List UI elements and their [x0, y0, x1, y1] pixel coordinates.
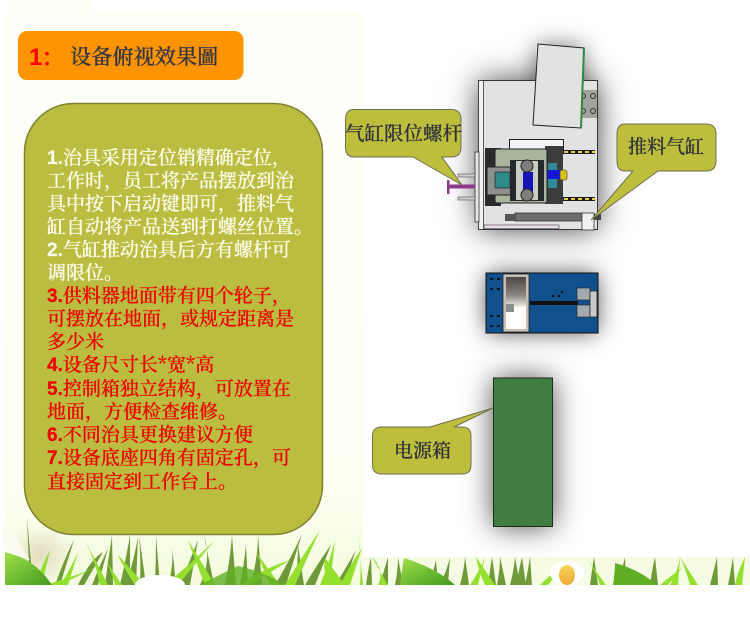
callout: push cylinder — [591, 124, 716, 220]
red description text: 直接固定到工作台上。 — [47, 467, 237, 494]
callout: cylinder limit screw — [345, 110, 462, 185]
rails — [563, 150, 595, 201]
shadow: tilted feeder card — [536, 46, 582, 126]
shadow: machine base — [479, 81, 597, 229]
white description text: 1.治具采用定位销精确定位， — [47, 143, 291, 170]
callout: power box — [372, 408, 493, 474]
bolt plate — [580, 90, 597, 118]
base plate — [478, 80, 598, 230]
callout: cylinder limit screw: 气缸限位螺杆 — [345, 123, 462, 145]
white description text — [47, 143, 313, 285]
grass: left meadow — [2, 518, 363, 597]
left bracket — [475, 152, 479, 222]
title bar — [18, 31, 244, 80]
white description text: 调限位。 — [47, 258, 123, 285]
red description text: 6.不同治具更换建议方便 — [47, 420, 253, 447]
slide block — [510, 140, 567, 204]
red description text: 7.设备底座四角有固定孔，可 — [47, 443, 291, 470]
white daisy — [135, 575, 185, 595]
pusher head — [577, 288, 597, 317]
panel: description — [24, 104, 322, 534]
callout: power box: 电源箱 — [394, 440, 451, 462]
red description text: 4.设备尺寸长*宽*高 — [47, 350, 214, 377]
grass: lower strip — [366, 557, 745, 585]
red description text: 多少米 — [47, 327, 104, 354]
callout: push cylinder: 推料气缸 — [628, 136, 704, 158]
diagram: green power box — [494, 378, 552, 526]
pusher rod — [530, 301, 578, 305]
diagram: top view of machine — [447, 44, 601, 230]
white description text: 2.气缸推动治具后方有螺杆可 — [47, 235, 291, 262]
limit screw — [447, 174, 475, 200]
mounting holes — [490, 278, 563, 327]
shadow: power box — [494, 379, 552, 526]
shadow: blue feeder — [487, 274, 597, 332]
white description text: 缸自动将产品送到打螺丝位置。 — [47, 212, 313, 239]
daisy — [550, 561, 584, 585]
red description text: 5.控制箱独立结构，可放置在 — [47, 374, 291, 401]
red description text: 可摆放在地面，或规定距离是 — [47, 304, 294, 331]
tilted feeder card — [533, 44, 585, 128]
bottom strip — [484, 225, 559, 228]
red description text — [47, 281, 294, 494]
white description text: 具中按下启动键即可，推料气 — [47, 189, 294, 216]
white description text: 工作时，员工将产品摆放到治 — [47, 166, 295, 193]
hopper — [503, 274, 529, 332]
push cylinder — [505, 213, 601, 230]
red description text: 地面，方便检查维修。 — [47, 397, 237, 424]
title bar: ： — [42, 48, 62, 70]
big leaf left — [5, 552, 52, 585]
title bar: 1 — [29, 44, 42, 71]
title bar: 设备俯视效果圖 — [70, 45, 218, 69]
jig plate — [485, 148, 547, 206]
diagram: blue feeder — [486, 273, 598, 333]
red description text: 3.供料器地面带有四个轮子， — [47, 281, 291, 308]
